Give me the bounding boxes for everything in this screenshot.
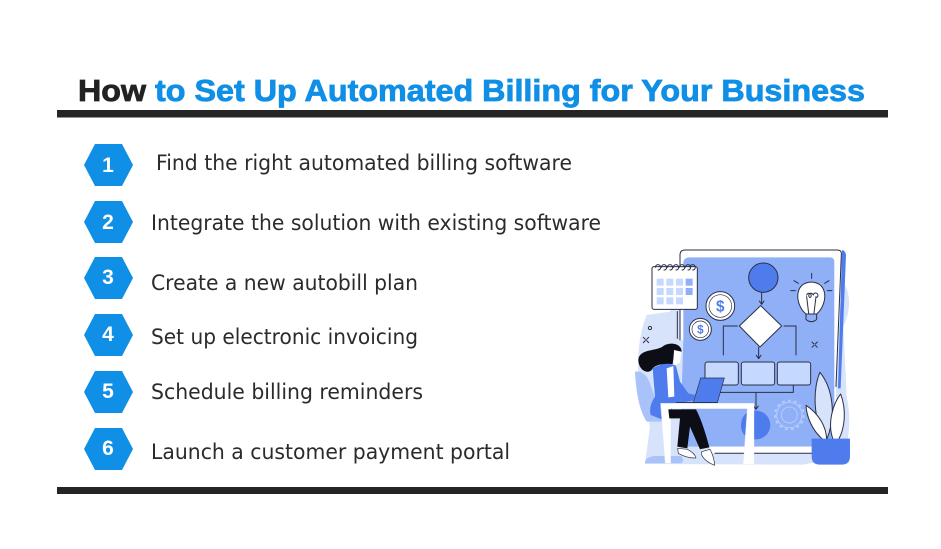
illustration: automated billing workflow (635, 250, 850, 465)
step 2 (84, 201, 601, 243)
step 5: Schedule billing reminders (151, 380, 423, 405)
legs (668, 409, 709, 449)
step 2: Integrate the solution with existing software (151, 211, 601, 236)
light bulb (791, 273, 832, 322)
board (680, 250, 846, 453)
plant (806, 372, 850, 465)
flowchart (705, 263, 811, 409)
desk (661, 403, 754, 464)
chair (635, 371, 663, 422)
hair (638, 344, 682, 372)
step 3: Create a new autobill plan (151, 271, 418, 296)
coins: $ (716, 298, 725, 315)
top rule (57, 110, 888, 118)
step 2: 2 (102, 211, 114, 234)
title: to Set Up Automated Billing for Your Business (155, 73, 865, 108)
gear (775, 401, 804, 429)
coins (689, 292, 735, 340)
step 5 (84, 371, 423, 413)
step 6 (84, 428, 510, 470)
step 1: 1 (102, 154, 114, 177)
step 5: 5 (102, 380, 114, 403)
step 4: 4 (102, 323, 114, 346)
title: How (78, 73, 147, 108)
small marks (643, 326, 817, 347)
bottom circle (741, 411, 770, 439)
woman at desk (635, 344, 754, 465)
step 1: Find the right automated billing software (156, 151, 572, 176)
step 4 (84, 314, 418, 356)
step 3 (84, 257, 418, 299)
face (673, 350, 681, 366)
background blob (638, 270, 849, 465)
step 6: Launch a customer payment portal (151, 440, 510, 465)
coins: $ (697, 324, 704, 337)
step 1 (84, 144, 572, 186)
laptop (693, 378, 724, 403)
step 4: Set up electronic invoicing (151, 325, 418, 350)
torso (650, 364, 695, 420)
shoes (678, 448, 696, 458)
bottom rule (57, 487, 888, 494)
step 6: 6 (102, 437, 114, 460)
step 3: 3 (102, 266, 114, 289)
calendar (652, 265, 697, 338)
